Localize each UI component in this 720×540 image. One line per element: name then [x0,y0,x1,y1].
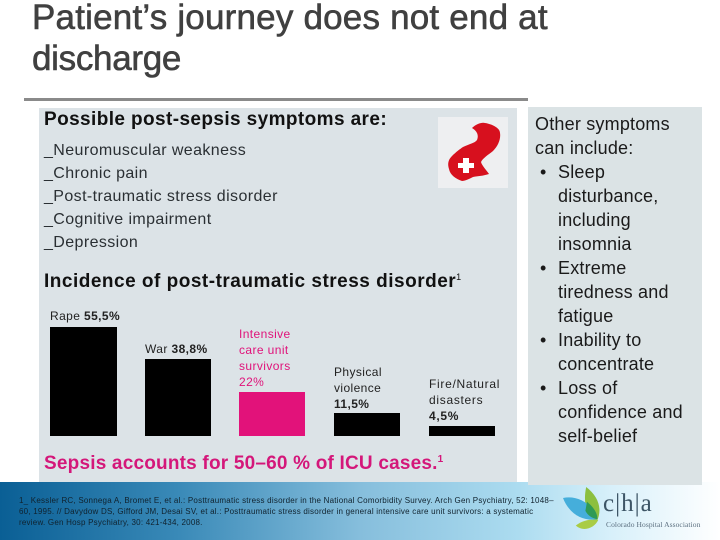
text block: other symptoms list: Inability to [558,330,641,350]
bar chart: PTSD incidence [50,309,500,436]
footnote references: 60, 1995. // Davydow DS, Gifford JM, Desai SV, et al.: Posttraumatic stress disorder in general intensive care unit survivors: a systematic [19,507,533,516]
text block: other symptoms list: including [558,210,631,230]
text block: other symptoms list: concentrate [558,354,654,374]
icon: leaves [563,487,600,529]
logo wordmark [603,490,700,529]
bar: fire and natural disasters: disasters [429,393,483,407]
text block: other symptoms list: tiredness and [558,282,669,302]
callout: sepsis share: Sepsis accounts for 50–60 % of ICU cases.1 [44,453,443,474]
bar: physical violence: Physical [334,365,382,379]
text block: other symptoms list: Extreme [558,258,626,278]
bar: war: War 38,8% [145,342,208,356]
bar: physical violence: violence [334,381,381,395]
symptom list: _Cognitive impairment [44,211,212,228]
heading: symptoms: Possible post-sepsis symptoms are: [44,109,387,130]
text block: other symptoms list: confidence and [558,402,683,422]
bar: physical violence: 11,5% [334,397,369,411]
symptom list [44,142,278,251]
footnote references: review. Gen Hosp Psychiatry, 30: 421-434, 2008. [19,518,203,527]
text block: other symptoms list [535,114,683,446]
text block: other symptoms list: • [540,378,547,398]
logo wordmark: c|h|a [603,490,653,517]
logo: Colorado Hospital Association [563,487,700,529]
bar: rape [50,309,120,436]
bar: intensive care unit survivors: care unit [239,343,289,357]
panel: other symptoms [528,107,702,485]
bar: rape: Rape 55,5% [50,309,120,323]
panel: post-sepsis symptoms [39,108,517,482]
text block: other symptoms list: can include: [535,138,633,158]
bar: intensive care unit survivors: survivors [239,359,291,373]
text block: other symptoms list: Loss of [558,378,617,398]
title: discharge [32,39,181,78]
text block: other symptoms list: fatigue [558,306,613,326]
text block: other symptoms list: • [540,162,547,182]
footer band [0,482,720,540]
symptom list: _Post-traumatic stress disorder [44,188,278,205]
text block: other symptoms list: • [540,330,547,350]
symptom list: _Chronic pain [44,165,148,182]
logo wordmark: Colorado Hospital Association [606,520,700,529]
bar: physical violence [334,365,400,436]
text block: other symptoms list: Other symptoms [535,114,670,134]
title [32,0,548,78]
bar: fire and natural disasters: 4,5% [429,409,459,423]
text block: other symptoms list: self-belief [558,426,637,446]
bar: intensive care unit survivors: 22% [239,375,264,389]
footnote references [19,496,554,527]
text block: other symptoms list: insomnia [558,234,632,254]
text block: other symptoms list: disturbance, [558,186,658,206]
symptom list: _Depression [44,234,138,251]
bar: intensive care unit survivors: Intensive [239,327,291,341]
bar: war [145,342,211,436]
bar: intensive care unit survivors [239,327,305,436]
text block: other symptoms list: Sleep [558,162,605,182]
heading: PTSD incidence: Incidence of post-traumatic stress disorder1 [44,271,462,292]
bar: fire and natural disasters [429,377,500,436]
bar: fire and natural disasters: Fire/Natural [429,377,500,391]
footnote references: 1_ Kessler RC, Sonnega A, Bromet E, et al.: Posttraumatic stress disorder in the National Comorbidity Survey. Arch Gen Psychiatry, 52: 1048– [19,496,554,505]
icon: sepsis logo [438,117,508,188]
text block: other symptoms list: • [540,258,547,278]
symptom list: _Neuromuscular weakness [44,142,246,159]
